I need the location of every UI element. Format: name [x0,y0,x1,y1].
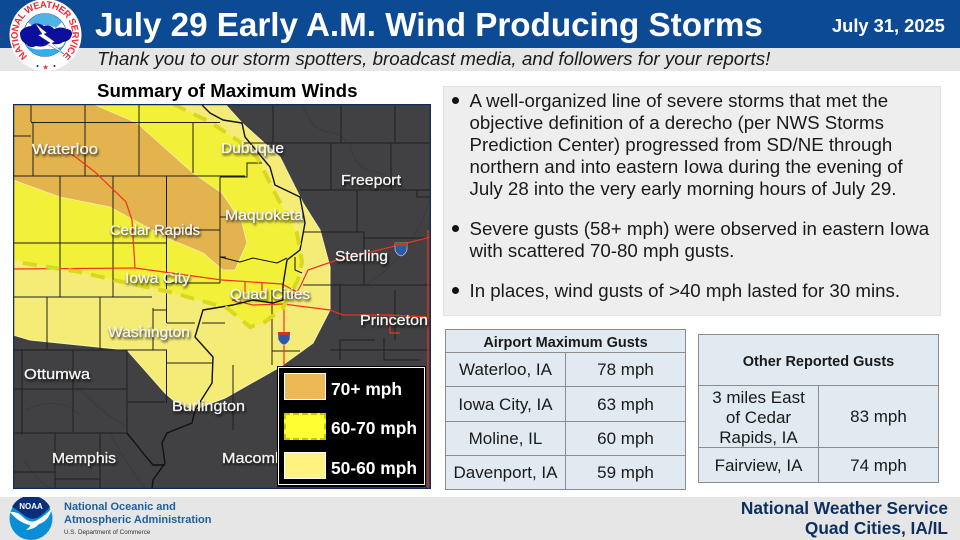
icon: National Weather Service logo: ★ [42,64,49,72]
legend [277,366,426,487]
city labels: Iowa City [125,270,191,287]
bullet 2: with scattered 70-80 mph gusts. [470,240,734,261]
footer office name: National Weather Service [741,498,948,518]
table: other reported gusts: 74 mph [850,456,907,475]
bullet 2 [452,218,930,261]
map: wind swath [13,104,431,489]
city labels: Sterling [335,248,388,265]
table: other reported gusts [698,334,939,483]
bullet 1: northern and into eastern Iowa during the evening of [470,156,903,177]
table: airport maximum gusts: Airport Maximum Gusts [483,334,648,350]
bullet 1: objective definition of a derecho (per NWS Storms [470,112,884,133]
city labels: Memphis [52,450,116,467]
city labels: Washington [108,324,190,341]
NOAA name: National Oceanic and [64,501,176,513]
swatch: 60-70 mph [284,413,326,440]
table: airport maximum gusts: 63 mph [597,395,654,414]
county lines [13,104,431,489]
rivers [127,105,305,489]
bullet 2: Severe gusts (58+ mph) were observed in eastern Iowa [470,218,929,239]
area: 60-70 mph [13,104,302,327]
label: 50-60 mph: 50-60 mph [331,458,417,478]
table: airport maximum gusts [445,329,686,490]
table: other reported gusts: Rapids, IA [719,428,798,447]
table: airport maximum gusts: 59 mph [597,463,654,482]
footer office name: Quad Cities, IA/IL [805,518,948,538]
swatch: 50-60 mph [284,452,326,479]
table: other reported gusts: Other Reported Gusts [743,354,894,370]
table: airport maximum gusts: 78 mph [597,360,654,379]
city labels: Freeport [341,172,402,189]
subtitle bar [0,48,960,71]
city labels: Cedar Rapids [110,222,200,239]
subtitle text: Thank you to our storm spotters, broadcast media, and followers for your reports! [97,48,770,69]
bullet 1: A well-organized line of severe storms that met the [470,90,888,111]
map heading: Summary of Maximum Winds [97,80,357,101]
table: airport maximum gusts: Moline, IL [469,429,542,448]
table: airport maximum gusts: Waterloo, IA [459,360,552,379]
label: 60-70 mph: 60-70 mph [331,418,417,438]
bullet 3: In places, wind gusts of >40 mph lasted for 30 mins. [470,280,900,301]
table: airport maximum gusts: Davenport, IA [454,463,557,482]
NOAA name: Atmospheric Administration [64,514,212,526]
bullet 1: Prediction Center) progressed from SD/NE through [470,134,892,155]
city labels: Quad Cities [230,286,310,303]
city labels: Dubuque [221,140,284,157]
city labels: Macomb [222,450,284,467]
city labels [24,140,428,467]
icon: National Weather Service logo: NATIONAL WEATHER SERVICE [11,1,79,60]
table: airport maximum gusts: 60 mph [597,429,654,448]
bullet 1 [452,90,903,199]
table: other reported gusts: of Cedar [726,408,791,427]
table: airport maximum gusts: Iowa City, IA [458,395,553,414]
dashed 60-70 mph outline [17,104,302,327]
footer office name [741,498,948,538]
title: July 29 Early A.M. Wind Producing Storms [95,7,763,44]
table: other reported gusts: 3 miles East [712,388,805,406]
date: July 31, 2025 [832,15,945,36]
interstate shields [278,243,407,345]
NOAA name [64,501,212,526]
header banner [0,0,960,48]
footer bar [0,497,960,540]
legend frame [278,367,425,485]
panel: summary text [444,87,940,315]
bullet 1: July 28 into the very early morning hours of July 29. [470,178,896,199]
table: other reported gusts: Fairview, IA [715,456,802,475]
city labels: Maquoketa [225,207,304,224]
faint rivers and streams [25,104,430,488]
area: 50-60 mph [13,104,330,410]
area: 70+ mph [13,104,247,270]
department of commerce: U.S. Department of Commerce [64,529,150,536]
label: 70+ mph: 70+ mph [331,379,402,399]
swatch: 70+ mph [284,373,326,400]
icon: NOAA logo [10,497,52,540]
city labels: Princeton [360,312,428,329]
icon: NOAA logo: NOAA [19,502,43,511]
city labels: Ottumwa [24,366,91,383]
roads [13,152,431,489]
city labels: Waterloo [32,141,98,158]
city labels: Burlington [172,398,245,415]
table: other reported gusts: 83 mph [850,407,907,426]
